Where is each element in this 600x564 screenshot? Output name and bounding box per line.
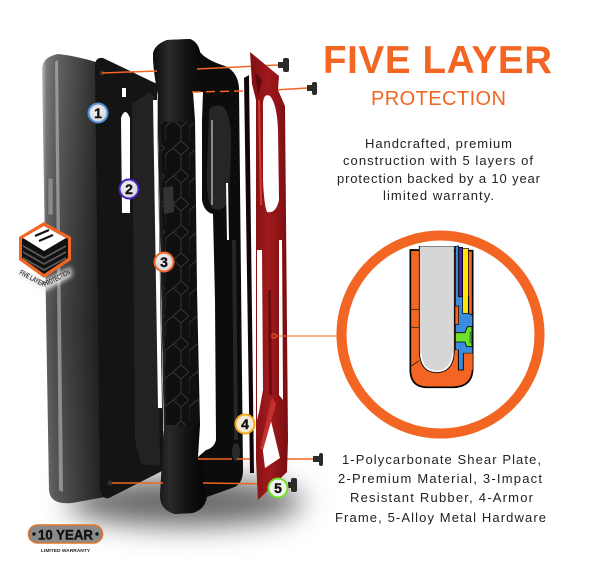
icon: 10 year limited warranty: LIMITED WARRANTY: [41, 548, 90, 553]
callout: cross-section diagram: [342, 236, 540, 434]
badge 3: [154, 252, 174, 272]
screw: bottom: [288, 478, 297, 492]
badge 4: [236, 414, 254, 434]
screw: top: [278, 58, 289, 72]
badge 2: [120, 180, 138, 198]
badge 3: 3: [160, 254, 168, 270]
layer 4: armor frame: [244, 52, 288, 500]
parts list text: Frame, 5-Alloy Metal Hardware: [335, 510, 546, 525]
layer 2: premium material: [132, 92, 162, 466]
parts list text: 1-Polycarbonate Shear Plate,: [342, 452, 541, 467]
badge 1: [88, 104, 108, 122]
ground shadow: [67, 478, 303, 526]
icon: 10 year limited warranty: 10 YEAR: [38, 526, 93, 542]
subtitle: PROTECTION: [371, 88, 506, 110]
description text: [337, 136, 541, 203]
parts list text: [335, 452, 546, 525]
badge 4: 4: [241, 416, 249, 432]
icon: five layer protection hexagon: FIVE LAYER: [18, 268, 46, 289]
badge 5: [268, 478, 288, 498]
screw: upper right: [307, 82, 317, 95]
callout leader line: [272, 334, 338, 338]
cross-section layers: [410, 243, 473, 387]
title: FIVE LAYER: [323, 39, 552, 82]
orange connector lines: [102, 65, 313, 484]
parts list text: Resistant Rubber, 4-Armor: [350, 490, 534, 505]
description text: Handcrafted, premium: [365, 136, 512, 151]
icon: 10 year limited warranty: [28, 525, 102, 553]
description text: protection backed by a 10 year: [337, 171, 541, 186]
badge 5: 5: [274, 480, 282, 496]
layer 3: impact resistant rubber: [153, 39, 243, 514]
screw: lower right: [313, 453, 323, 466]
description text: construction with 5 layers of: [343, 153, 533, 168]
parts list text: 2-Premium Material, 3-Impact: [338, 471, 542, 486]
icon: five layer protection hexagon: PROTECTION: [42, 268, 72, 289]
icon: five layer protection hexagon: [18, 222, 72, 291]
layer 1: polycarbonate shear plate: [95, 58, 164, 498]
badge 2: 2: [125, 181, 133, 197]
description text: limited warranty.: [383, 188, 494, 203]
badge 1: 1: [94, 105, 102, 121]
phone: [42, 54, 105, 503]
